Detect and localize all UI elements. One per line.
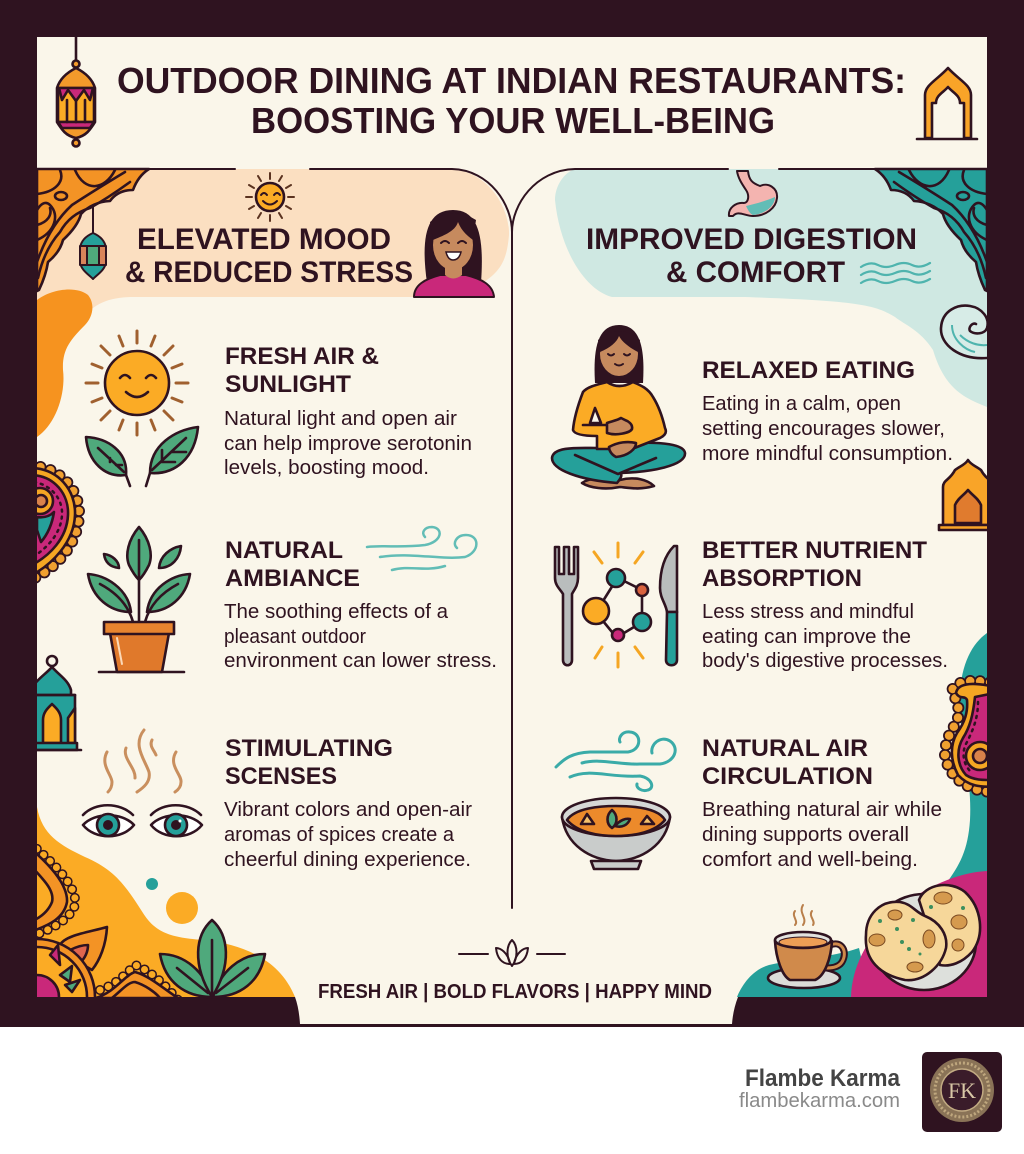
text: circulation body: Breathing natural air while [702,799,942,821]
ornament: leaf divider [459,940,565,966]
text: brand name: Flambe Karma [745,1065,901,1092]
panel: elevated mood column [80,173,497,871]
text: tagline: FRESH AIR | BOLD FLAVORS | HAPPY MIND [318,981,712,1003]
corner ornament: bottom-left mandala [37,844,182,997]
blob: peach header [37,169,509,308]
text: circulation body: comfort and well-being. [702,849,918,871]
column divider lines [37,169,987,908]
icon: cutlery and molecule [555,543,677,667]
text: natural ambiance body: The soothing effects of a [224,601,449,623]
text: natural ambiance body [224,601,497,672]
brand block [739,1052,1002,1132]
text: natural ambiance body: environment can lower stress. [224,650,497,672]
icon: curry bowl and breeze [556,732,675,869]
corner ornament: orange [37,169,149,291]
text: circulation body [702,799,942,871]
text: nutrient body [702,601,948,672]
blob: teal right [949,633,987,880]
heading: elevated mood [125,223,413,289]
text: fresh air heading: SUNLIGHT [225,371,351,398]
logo: FK [948,1078,976,1103]
icon: hanging lantern [57,37,95,146]
text: nutrient heading: BETTER NUTRIENT [702,537,927,564]
text: nutrient body: body's digestive processes. [702,650,948,672]
text: natural ambiance heading [225,537,360,592]
dot: yellow [166,892,198,924]
icon: left lantern [30,656,81,750]
title: OUTDOOR DINING AT INDIAN RESTAURANTS: [117,60,906,101]
icon: aroma and eyes [83,730,202,836]
text: relaxed eating body [702,393,953,465]
text: relaxed eating body: setting encourages slower, [702,418,945,440]
icon: smiling woman [414,210,494,297]
text: fresh air body [224,408,472,479]
heading: elevated mood: ELEVATED MOOD [137,223,391,256]
icon: naan on plate [866,885,980,990]
text: natural ambiance heading: NATURAL [225,537,343,564]
text: brand url: flambekarma.com [739,1090,900,1112]
text: natural ambiance heading: AMBIANCE [225,565,360,592]
item: natural ambiance [88,527,497,672]
blob: magenta bottom right [851,871,987,997]
icon: right dome [938,458,987,532]
icon: tea cup [768,905,844,988]
heading: improved digestion: & COMFORT [666,256,845,289]
heading: improved digestion [586,223,917,289]
panel: improved digestion column [552,171,988,871]
corner ornament: teal [875,169,987,291]
icon: stomach [729,171,777,216]
text: stimulating body: cheerful dining experience. [224,849,471,871]
text: natural ambiance body: pleasant outdoor [224,626,366,648]
text: fresh air body: levels, boosting mood. [224,457,429,479]
icon: meditating woman [552,325,685,488]
item: fresh air and sunlight [86,331,472,486]
text: circulation body: dining supports overall [702,824,909,846]
background colour blobs [37,169,987,997]
text: stimulating heading: STIMULATING [225,735,393,762]
icon: waves [861,263,930,283]
blob: mint header [555,169,987,407]
icon: potted plant [88,527,190,672]
text: relaxed eating body: more mindful consumption. [702,443,953,465]
heading: improved digestion: IMPROVED DIGESTION [586,223,917,256]
text: fresh air body: can help improve serotonin [224,433,472,455]
text: circulation heading [702,735,873,790]
icon: arch [917,68,977,139]
logo [922,1052,1002,1132]
icon: breeze [367,527,476,570]
icon: bottom leaves [160,920,265,997]
text: fresh air heading [225,343,379,398]
blob: orange left [37,290,92,437]
title [117,60,906,141]
item: natural air circulation [556,732,942,871]
icon: small green lantern [80,207,106,279]
text: stimulating heading: SCENSES [225,763,337,790]
text: fresh air heading: FRESH AIR & [225,343,379,370]
text: nutrient heading [702,537,927,592]
text: stimulating heading [225,735,393,790]
dot: teal [146,878,158,890]
text: relaxed eating heading: RELAXED EATING [702,357,915,384]
icon: swirl [941,306,988,358]
blob: teal bottom right [737,948,870,997]
item: relaxed eating [552,325,953,488]
text: fresh air body: Natural light and open air [224,408,457,430]
text: nutrient body: Less stress and mindful [702,601,914,623]
footer tagline [318,940,712,1003]
heading: elevated mood: & REDUCED STRESS [125,256,413,289]
text: relaxed eating body: Eating in a calm, open [702,393,901,415]
blob: yellow bottom left [37,807,295,997]
text: stimulating body [224,799,472,871]
icon: left paisley [27,466,79,580]
text: stimulating body: aromas of spices create a [224,824,455,846]
text: circulation heading: CIRCULATION [702,763,873,790]
text: circulation heading: NATURAL AIR [702,735,868,762]
icon: small sun [246,173,294,221]
item: better nutrient absorption [555,537,948,672]
cream panel [37,37,987,1024]
text: nutrient body: eating can improve the [702,626,911,648]
text: nutrient heading: ABSORPTION [702,565,862,592]
icon: right paisley [945,681,1000,792]
item: stimulating senses [83,730,472,871]
title: BOOSTING YOUR WELL-BEING [251,100,775,141]
icon: sun with leaves [86,331,198,486]
text: stimulating body: Vibrant colors and open-air [224,799,472,821]
